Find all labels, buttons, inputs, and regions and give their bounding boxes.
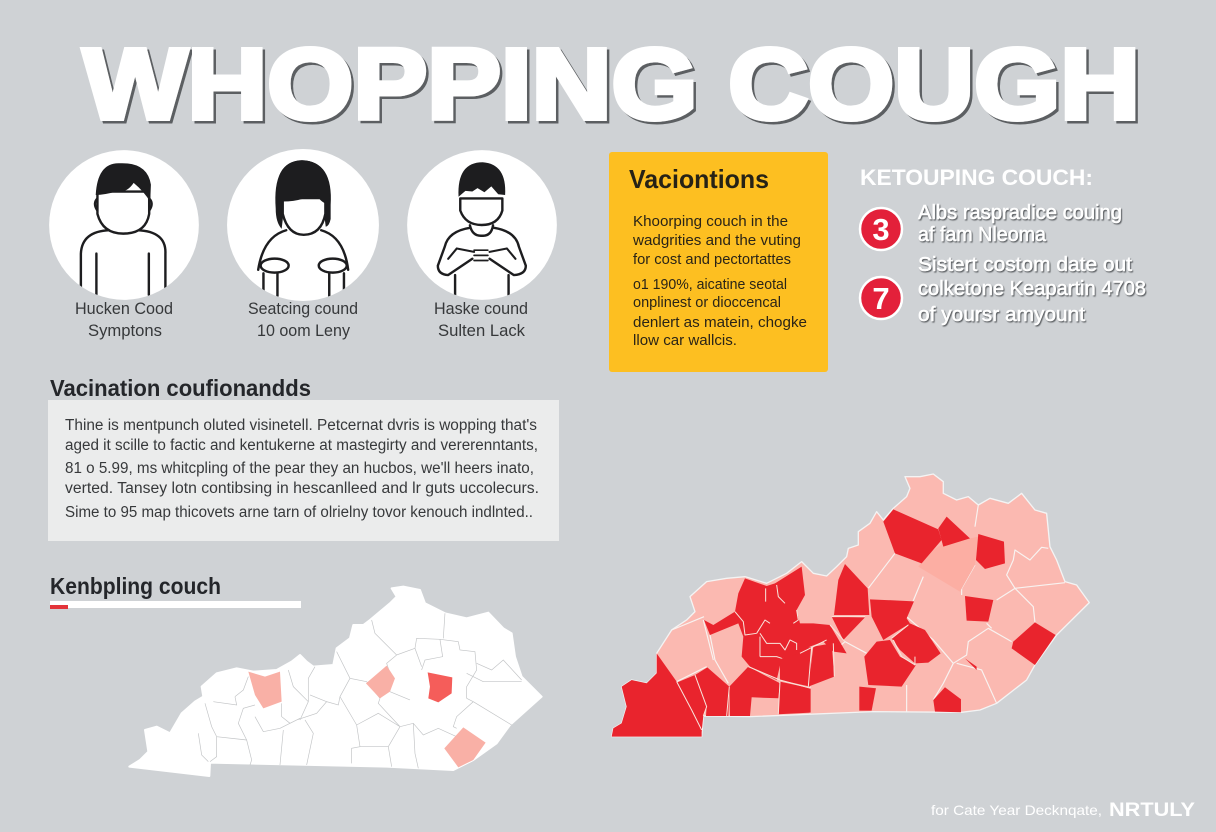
icon: person holding hands together: [407, 150, 557, 300]
legend bar: [50, 601, 301, 609]
fact text one: [918, 202, 1122, 246]
badge: 3: [860, 208, 902, 250]
badge: 7: [860, 277, 902, 319]
card body text: [632, 213, 807, 349]
fact text two: Sistert costom date out: [918, 254, 1132, 276]
icon: person with plain arms: [49, 150, 199, 300]
symptom labels: Hucken Cood: [75, 300, 173, 318]
red county borders: [677, 585, 915, 730]
map: white county map: [129, 587, 542, 776]
panel: vaccination text: [48, 400, 559, 541]
fact text two: colketone Keapartin 4708: [918, 278, 1146, 300]
symptom labels: Seatcing cound: [248, 300, 358, 318]
panel: vaccinations card: [609, 152, 828, 372]
symptom labels: 10 oom Leny: [257, 322, 351, 340]
badge: 3: 3: [872, 212, 890, 247]
panel: vaccination text: Thine is mentpunch oluted visinetell. Petcernat dvris is wopping that's: [65, 417, 537, 434]
panel: vaccination text: Sime to 95 map thicovets arne tarn of olrielny tovor kenouch indlnted..: [65, 504, 533, 521]
symptom labels: [75, 300, 528, 340]
symptom labels: Symptons: [88, 322, 162, 340]
panel: vaccination text: verted. Tansey lotn contibsing in hescanlleed and lr guts uccolecurs.: [65, 480, 539, 497]
fact text one: Albs raspradice couing: [918, 202, 1122, 224]
state outline in pink: [612, 474, 1089, 737]
symptom labels: Haske cound: [434, 300, 528, 318]
county dividers: [672, 505, 1065, 713]
heading: vaccination: Vacination coufionandds: [50, 375, 311, 401]
card body text: Khoorping couch in the: [633, 213, 788, 230]
badge: 7: 7: [872, 281, 890, 316]
card heading: Vaciontions: [629, 164, 769, 194]
card body text: wadgrities and the vuting: [632, 232, 801, 249]
key facts heading: KETOUPING COUCH:: [860, 165, 1093, 190]
card body text: onplinest or dioccencal: [633, 294, 781, 311]
title: WHOPPING COUGH: [83, 28, 1140, 140]
heading: map: Kenbpling couch: [50, 573, 221, 599]
panel: vaccination text: 81 o 5.99, ms whitcpling of the pear they an hucbos, we'll heers inato,: [65, 460, 534, 477]
symptom labels: Sulten Lack: [438, 322, 526, 340]
card body text: llow car wallcis.: [633, 332, 737, 349]
card body text: for cost and pectortattes: [633, 251, 791, 268]
panel: vaccination text: aged it scille to factic and kentukerne at mastegirty and vererenntants,: [65, 437, 538, 454]
footer credit: for Cate Year Decknqate,: [931, 802, 1102, 818]
panel: key facts: [860, 165, 1146, 326]
icon: person with crutches: [227, 149, 379, 301]
highlighted counties: [248, 666, 486, 767]
fact text one: af fam Nleoma: [918, 224, 1047, 246]
red counties: [612, 509, 1056, 737]
card body text: denlert as matein, chogke: [633, 314, 807, 331]
fact text two: [918, 254, 1146, 326]
footer credit: NRTULY: [1109, 800, 1195, 821]
panel: symptom icons: [49, 149, 557, 340]
footer credit: [931, 800, 1195, 821]
card body text: o1 190%, aicatine seotal: [633, 276, 787, 293]
map: red county map: [612, 474, 1089, 737]
darker pink county: [918, 537, 978, 592]
fact text two: of yoursr amyount: [918, 304, 1085, 326]
